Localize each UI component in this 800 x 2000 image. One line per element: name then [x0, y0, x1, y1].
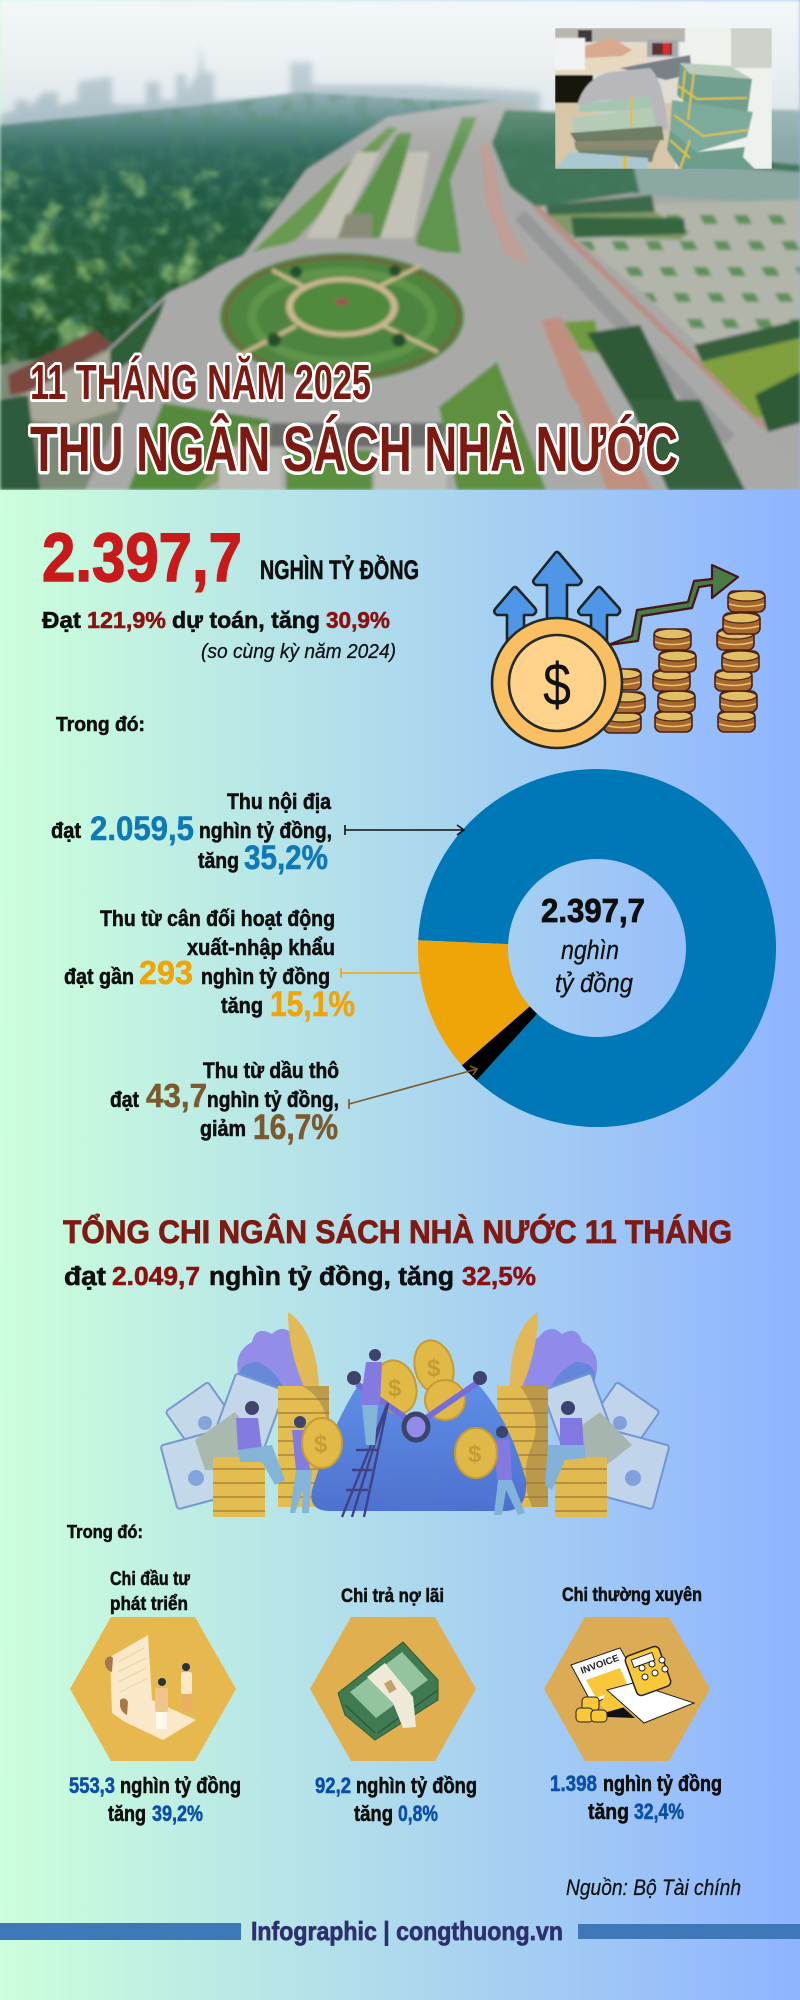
- heading figures: nghìn tỷ đồng, tăng: [209, 1263, 454, 1291]
- callout: domestic revenue: tăng: [198, 848, 239, 873]
- source note: Nguồn: Bộ Tài chính: [566, 1875, 741, 1900]
- donut centre unit: nghìn: [561, 935, 619, 965]
- donut centre value: 2.397,7: [541, 892, 645, 929]
- callout: domestic revenue: nghìn tỷ đồng,: [199, 818, 332, 843]
- title line: 11 tháng năm 2025: 11 THÁNG NĂM 2025: [30, 356, 371, 410]
- panel figures: 92,2: [315, 1773, 351, 1798]
- footer bar right: [578, 1924, 800, 1939]
- panel figures: 0,8%: [398, 1801, 438, 1826]
- expenditure heading: [63, 1214, 732, 1291]
- illustration: money bag, coins and people: [160, 1312, 670, 1517]
- footer band: [0, 1916, 800, 1946]
- callout: import-export balance: 293: [139, 954, 193, 991]
- achievement line: Đạt: [42, 607, 81, 633]
- callout: crude oil: giảm: [200, 1116, 246, 1141]
- coins in the bag: [370, 1336, 465, 1420]
- arrow: domestic revenue: [345, 825, 464, 835]
- callout: crude oil: [110, 1058, 339, 1147]
- panel figures: 1.398: [550, 1771, 597, 1796]
- achievement line: 30,9%: [326, 607, 390, 633]
- hexagon icon: invoice and calculator: INVOICE: [579, 1653, 621, 1677]
- panel heading: Chi đầu tư: [110, 1569, 190, 1590]
- panel figures: nghìn tỷ đồng: [356, 1773, 477, 1798]
- donut centre unit: tỷ đồng: [555, 968, 633, 998]
- segment: crude oil: [462, 1006, 537, 1080]
- unit label: NGHÌN TỶ ĐỒNG: [260, 555, 419, 585]
- leaves: [237, 1312, 597, 1387]
- panel heading: Chi trả nợ lãi: [341, 1586, 444, 1607]
- panel figures: [315, 1773, 477, 1826]
- achievement line: [42, 607, 390, 633]
- callout: import-export balance: đạt gần: [64, 964, 134, 989]
- panel heading: phát triển: [110, 1594, 188, 1615]
- arrow: crude oil: [349, 1066, 477, 1109]
- panel heading: [110, 1569, 190, 1615]
- footer text: Infographic | congthuong.vn: [251, 1916, 563, 1946]
- hexagon icon: invoice and calculator: [544, 1617, 710, 1761]
- panel heading: Chi thường xuyên: [562, 1585, 702, 1606]
- hexagon icon: banknote bundle: [310, 1617, 476, 1761]
- ladder: [342, 1403, 388, 1517]
- panel figures: tăng: [588, 1799, 629, 1824]
- coins in the bag: $: [388, 1375, 402, 1402]
- heading figures: [64, 1263, 536, 1291]
- panel figures: tăng: [354, 1801, 393, 1826]
- tall coin stacks: [278, 1386, 548, 1507]
- panel figures: 32,4%: [634, 1799, 684, 1824]
- hexagon icon: contract: [70, 1617, 236, 1761]
- icon: coin, arrows and coin stacks: [492, 552, 765, 748]
- panel figures: nghìn tỷ đồng: [603, 1771, 722, 1796]
- panel figures: nghìn tỷ đồng: [120, 1773, 241, 1798]
- segment: domestic revenue: [418, 769, 776, 1127]
- people: [236, 1349, 585, 1515]
- comparison note: (so cùng kỳ năm 2024): [201, 641, 396, 663]
- hero inset photo: stacks of banknotes: [555, 28, 772, 169]
- callout: crude oil: 16,7%: [253, 1108, 338, 1147]
- callout: domestic revenue: Thu nội địa: [227, 789, 332, 814]
- dollar sign: $: [543, 651, 571, 718]
- panel figures: tăng: [108, 1801, 146, 1826]
- panel figures: [69, 1773, 241, 1826]
- heading figures: 32,5%: [462, 1263, 536, 1291]
- donut centre unit: [555, 935, 633, 998]
- panel: interest payments: [310, 1586, 477, 1826]
- footer bar left: [0, 1923, 241, 1940]
- achievement line: 121,9%: [87, 607, 166, 633]
- hero title: [30, 356, 678, 485]
- callout: import-export balance: [64, 906, 355, 1024]
- callout: import-export balance: tăng: [221, 993, 263, 1018]
- heading title: TỔNG CHI NGÂN SÁCH NHÀ NƯỚC 11 THÁNG: [63, 1214, 732, 1250]
- expenditure breakdown label: Trong đó:: [67, 1521, 143, 1542]
- blue arrows: [494, 587, 536, 680]
- segment: import-export balance: [418, 940, 530, 1065]
- coins in the bag: $: [427, 1355, 441, 1382]
- held coins: $: [314, 1431, 328, 1458]
- callout: domestic revenue: [51, 789, 332, 877]
- callout: crude oil: đạt: [110, 1087, 140, 1112]
- held coins: $: [468, 1441, 482, 1468]
- donut chart: [418, 769, 776, 1127]
- achievement line: dự toán, tăng: [172, 607, 320, 633]
- trend arrow: [608, 565, 738, 645]
- callout: domestic revenue: 2.059,5: [90, 810, 194, 848]
- panel figures: 39,2%: [152, 1801, 203, 1826]
- low coin stacks: [213, 1457, 265, 1517]
- callout: crude oil: 43,7: [146, 1077, 207, 1114]
- panel figures: [550, 1771, 722, 1824]
- callout: import-export balance: Thu từ cân đối hoạt động: [100, 906, 335, 931]
- callout: crude oil: nghìn tỷ đồng,: [207, 1087, 339, 1112]
- panel: recurrent spending: [544, 1585, 722, 1824]
- held coins: [302, 1418, 497, 1478]
- hero photo: aerial view of boulevard and roundabout: [0, 0, 800, 490]
- large coin: [492, 618, 622, 748]
- arrow: import-export balance: [341, 968, 430, 978]
- heading figures: 2.049,7: [112, 1263, 200, 1291]
- breakdown label: Trong đó:: [56, 713, 145, 736]
- banknotes: [160, 1373, 670, 1509]
- callout: domestic revenue: đạt: [51, 818, 82, 843]
- heading figures: đạt: [64, 1263, 107, 1291]
- bag clasp: [357, 1383, 477, 1425]
- panel: development investment: [69, 1569, 241, 1826]
- money bag: [311, 1383, 526, 1511]
- total revenue figure: 2.397,7: [42, 519, 242, 596]
- callout: crude oil: Thu từ dầu thô: [203, 1058, 339, 1083]
- revenue headline: [42, 519, 419, 736]
- callout: import-export balance: xuất-nhập khẩu: [187, 935, 335, 960]
- callout: import-export balance: 15,1%: [270, 985, 355, 1024]
- callout: domestic revenue: 35,2%: [244, 839, 328, 877]
- panel figures: 553,3: [69, 1773, 115, 1798]
- callout: import-export balance: nghìn tỷ đồng: [201, 964, 330, 989]
- coin stacks: [604, 591, 765, 733]
